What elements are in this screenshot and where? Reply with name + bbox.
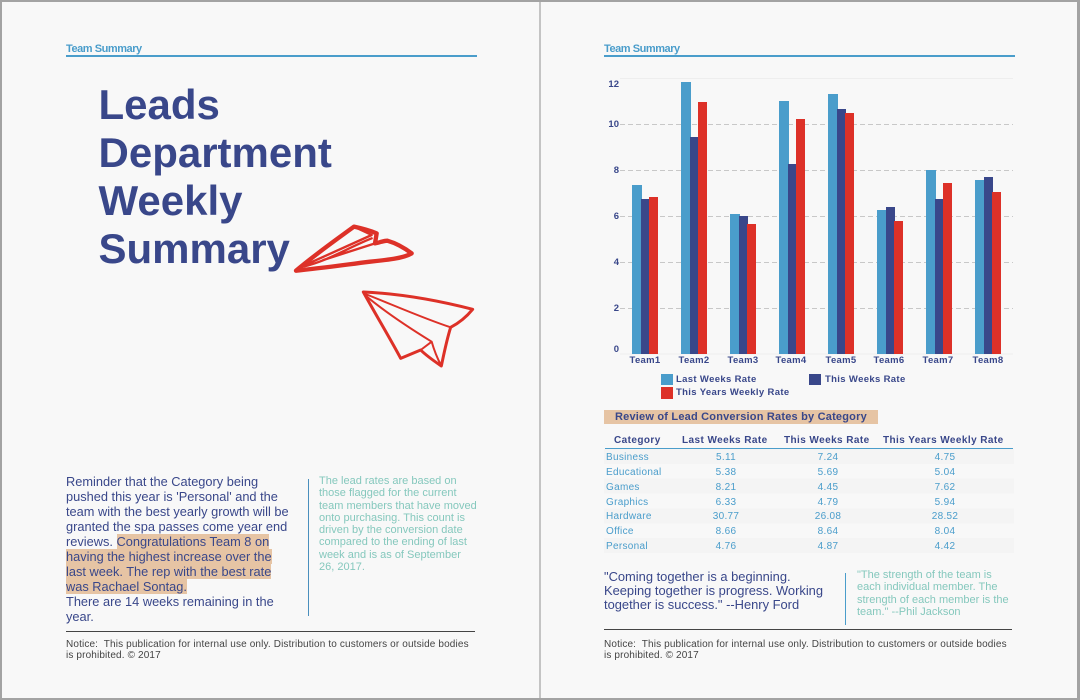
quote: Phil Jackson: team." --Phil Jackson [857, 606, 961, 618]
table rows: 5.94 [935, 497, 955, 508]
table rows: 8.64 [818, 526, 838, 537]
table header row: Category [614, 435, 661, 446]
title: Department [98, 129, 332, 176]
table rows: Office [606, 526, 634, 537]
side note: those flagged for the current [319, 487, 457, 499]
side note: onto purchasing. This count is [319, 512, 465, 524]
table rows: 5.04 [935, 467, 955, 478]
reminder text: team with the best yearly growth will be [66, 504, 289, 519]
series: this years weekly rate [649, 102, 1001, 354]
table rows: Hardware [606, 511, 652, 522]
icon: upper paper plane [296, 227, 412, 271]
table rows: 26.08 [815, 511, 841, 522]
reminder text: Congratulations Team 8 on [116, 534, 269, 549]
table rows: 7.62 [935, 482, 955, 493]
running header left: Team Summary [66, 43, 142, 55]
legend: Last Weeks Rate [676, 374, 757, 385]
y axis labels: 4 [614, 257, 620, 268]
quote: Phil Jackson [857, 569, 1009, 618]
y axis labels: 2 [614, 303, 619, 314]
reminder text [66, 474, 289, 624]
table rows: 4.76 [716, 541, 736, 552]
reminder text: There are 14 weeks remaining in the [66, 594, 274, 609]
reminder text: last week. The rep with the best rate [66, 564, 271, 579]
x axis labels [630, 355, 1003, 366]
legend: This Years Weekly Rate [676, 387, 790, 398]
notice right [604, 639, 1007, 661]
left page [66, 43, 477, 661]
table rows: Educational [606, 467, 662, 478]
quote: Phil Jackson: "The strength of the team is [857, 569, 992, 581]
notice right: is prohibited. © 2017 [604, 650, 699, 661]
series: last weeks rate [632, 82, 985, 354]
x axis labels: Team2 [679, 355, 709, 366]
side note [319, 475, 477, 573]
running header right: Team Summary [604, 43, 680, 55]
table header row: This Years Weekly Rate [883, 435, 1004, 446]
table rows: Business [606, 452, 649, 463]
icon: lower paper plane [363, 292, 473, 366]
quote: Phil Jackson: each individual member. The [857, 581, 997, 593]
row bands [604, 449, 1014, 553]
y axis labels: 0 [614, 344, 619, 355]
bar chart [608, 78, 1013, 399]
reminder text: having the highest increase over the [66, 549, 272, 564]
table rows: 6.33 [716, 497, 736, 508]
title: Weekly [98, 177, 242, 224]
quote: Henry Ford: "Coming together is a beginning. [604, 569, 791, 584]
side note: compared to the ending of last [319, 536, 467, 548]
quote: Henry Ford [604, 569, 823, 612]
footer rule right [604, 629, 1012, 630]
table header row [605, 432, 1013, 449]
table rows: 5.11 [716, 452, 736, 463]
table rows: 4.75 [935, 452, 955, 463]
table rows: Games [606, 482, 640, 493]
table rows: 28.52 [932, 511, 958, 522]
notice left: is prohibited. © 2017 [66, 650, 161, 661]
x axis labels: Team1 [630, 355, 661, 366]
icon: paper planes [294, 224, 474, 368]
table rows: 30.77 [713, 511, 739, 522]
page divider [539, 2, 541, 698]
side note: driven by the conversion date [319, 524, 463, 536]
table rows: Graphics [606, 497, 648, 508]
quote: Phil Jackson: strength of each member is the [857, 594, 1009, 606]
quote: Henry Ford: together is success." --Henry Ford [604, 597, 799, 612]
side note: week and is as of September [319, 549, 461, 561]
table rows: 4.87 [818, 541, 838, 552]
table rows: 8.04 [935, 526, 955, 537]
legend: This Weeks Rate [825, 374, 906, 385]
x axis labels: Team3 [728, 355, 758, 366]
side note: 26, 2017. [319, 561, 365, 573]
table rows: 4.45 [818, 482, 838, 493]
y axis labels: 10 [608, 119, 619, 130]
notice right: Notice: This publication for internal use only. Distribution to customers or outside bodies [604, 639, 1007, 650]
header rule right [604, 55, 1015, 57]
x axis labels: Team7 [923, 355, 953, 366]
reminder text: pushed this year is 'Personal' and the [66, 489, 278, 504]
table: conversion rates [605, 435, 1013, 552]
reminder text: granted the spa passes come year end [66, 519, 287, 534]
title: Summary [98, 225, 290, 272]
legend [661, 374, 906, 399]
table rows: 8.21 [716, 482, 736, 493]
table rows: 4.42 [935, 541, 955, 552]
series: this weeks rate [641, 109, 993, 354]
table rows: 5.69 [818, 467, 838, 478]
x axis labels: Team4 [776, 355, 807, 366]
quote: Henry Ford: Keeping together is progress. Working [604, 583, 823, 598]
side note: The lead rates are based on [319, 475, 457, 487]
table rows: 4.79 [818, 497, 838, 508]
table header row: This Weeks Rate [784, 435, 870, 446]
header rule left [66, 55, 477, 57]
notice left [66, 639, 469, 661]
table rows: 7.24 [818, 452, 838, 463]
table rows: 8.66 [716, 526, 736, 537]
table heading: Review of Lead Conversion Rates by Category [615, 411, 867, 423]
reminder text: reviews. [66, 534, 113, 549]
title [98, 81, 332, 272]
x axis labels: Team5 [826, 355, 857, 366]
side note: team members that have moved [319, 500, 477, 512]
reminder text: was Rachael Sontag. [66, 579, 187, 594]
y axis labels: 6 [614, 211, 619, 222]
reminder text: Reminder that the Category being [66, 474, 258, 489]
table rows: Personal [606, 541, 648, 552]
notice left: Notice: This publication for internal use only. Distribution to customers or outside bodies [66, 639, 469, 650]
reminder text: year. [66, 609, 94, 624]
y axis labels: 12 [608, 79, 619, 90]
x axis labels: Team6 [874, 355, 904, 366]
footer rule left [66, 631, 475, 632]
table rows: 5.38 [716, 467, 736, 478]
y axis labels: 8 [614, 165, 619, 176]
y axis labels [608, 79, 620, 355]
table header row: Last Weeks Rate [682, 435, 768, 446]
title: Leads [98, 81, 220, 128]
quote divider [845, 573, 846, 625]
x axis labels: Team8 [973, 355, 1003, 366]
side divider [308, 479, 309, 616]
table rows [606, 452, 958, 552]
